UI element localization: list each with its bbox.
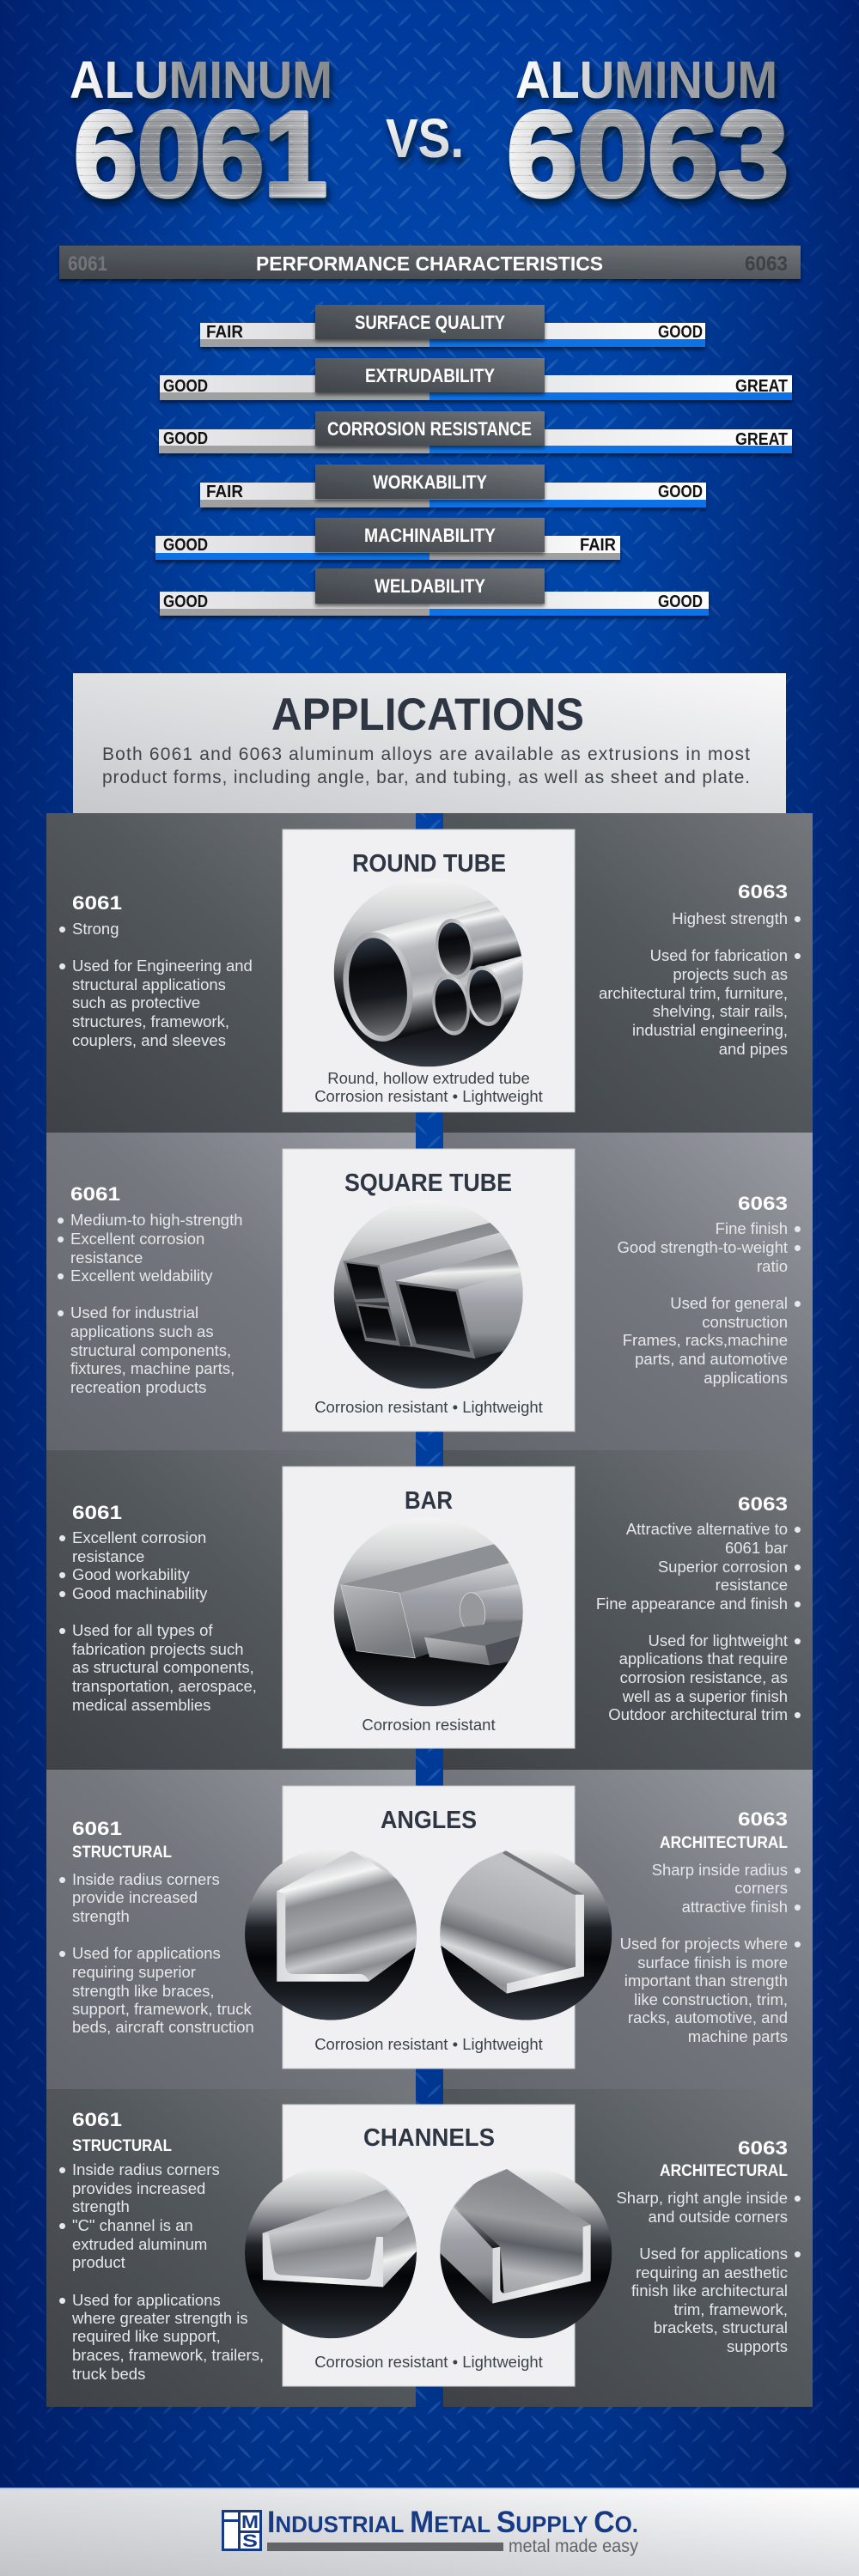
card: round tube: Corrosion resistant • Lightweight	[314, 1087, 543, 1105]
panel: round tube 6061: couplers, and sleeves	[72, 1031, 226, 1049]
comparison: corrosion resistance: GREAT	[735, 430, 788, 449]
panel: square tube 6061: Medium-to high-strength	[70, 1211, 243, 1229]
performance characteristics header: 6063	[745, 252, 788, 276]
comparison: corrosion resistance	[159, 411, 792, 453]
card: bar: BAR	[405, 1487, 453, 1515]
title right: aluminum 6063: 6063	[507, 86, 789, 222]
comparison: surface quality: FAIR	[206, 323, 244, 342]
title vs: VS.	[386, 107, 464, 169]
panel: square tube 6063: Fine finish	[716, 1219, 788, 1237]
logo icon	[222, 2510, 262, 2551]
panel: round tube 6061: structures, framework,	[72, 1012, 229, 1030]
panel: square tube 6063: 6063	[738, 1193, 788, 1214]
panel: angles 6061: requiring superior	[72, 1963, 196, 1981]
applications intro panel: product forms, including angle, bar, and tubing, as well as sheet and plate.	[102, 768, 750, 787]
title left: aluminum 6061: ALUMINUM	[70, 51, 332, 109]
card: angles: Corrosion resistant • Lightweight	[314, 2035, 543, 2053]
panel: channels 6063: •	[794, 2185, 801, 2211]
panel: round tube 6063: shelving, stair rails,	[653, 1002, 788, 1020]
panel: channels 6063	[443, 2089, 813, 2407]
panel: square tube 6061	[46, 1133, 416, 1450]
panel: square tube 6061: Excellent corrosion	[70, 1230, 204, 1248]
comparison: machinability: GOOD	[163, 536, 208, 555]
panel: bar 6061: transportation, aerospace,	[72, 1677, 257, 1695]
logo icon: S	[242, 2531, 258, 2551]
icon: round tubes	[334, 878, 530, 1066]
panel: bar 6061: Good workability	[72, 1565, 191, 1583]
panel: angles 6063: attractive finish	[682, 1898, 788, 1916]
panel: square tube 6061: •	[57, 1263, 64, 1289]
card: channels: Corrosion resistant • Lightweight	[314, 2353, 543, 2371]
panel: channels 6061: STRUCTURAL	[72, 2137, 172, 2155]
panel: square tube 6063	[443, 1133, 813, 1450]
panel: angles 6063	[443, 1770, 813, 2089]
panel: bar 6063: •	[794, 1628, 801, 1654]
panel: bar 6063: Attractive alternative to	[626, 1520, 788, 1538]
panel: square tube 6063: Frames, racks,machine	[623, 1331, 788, 1349]
panel: square tube 6061: Used for industrial	[70, 1303, 198, 1321]
panel: bar 6061: as structural components,	[72, 1658, 254, 1676]
comparison: extrudability: GREAT	[735, 377, 788, 396]
panel: angles 6061	[46, 1770, 416, 2089]
comparison: workability	[200, 465, 706, 507]
panel: bar 6061: •	[58, 1618, 66, 1643]
panel: round tube 6063: •	[794, 943, 801, 969]
title right: aluminum 6063: 6063	[507, 86, 789, 222]
panel: round tube 6061: structural applications	[72, 975, 226, 993]
panel: channels 6063: •	[794, 2241, 801, 2267]
comparison: workability: WORKABILITY	[373, 471, 487, 493]
panel: bar 6061: •	[58, 1525, 66, 1551]
panel: bar 6061: resistance	[72, 1547, 144, 1565]
panel: round tube 6063: •	[794, 906, 801, 932]
panel: angles 6061: •	[58, 1867, 66, 1893]
panel: bar 6063: 6061 bar	[725, 1539, 788, 1557]
panel: square tube 6063: Used for general	[670, 1294, 788, 1312]
card: bar	[283, 1467, 575, 1748]
panel: square tube 6061: 6061	[70, 1183, 120, 1205]
panel: angles 6061: 6061	[72, 1818, 122, 1839]
panel: channels 6061: provides increased	[72, 2179, 205, 2197]
comparison: surface quality	[200, 305, 705, 347]
performance characteristics header: PERFORMANCE CHARACTERISTICS	[256, 252, 603, 275]
panel: round tube 6063: Used for fabrication	[650, 946, 788, 964]
panel: square tube 6063: •	[794, 1291, 801, 1316]
card: angles	[245, 1786, 612, 2069]
panel: round tube 6061	[46, 813, 416, 1133]
panel: square tube 6061: •	[57, 1300, 64, 1326]
panel: bar 6063: applications that require	[619, 1649, 788, 1668]
panel: square tube 6063: ratio	[757, 1257, 788, 1275]
row: channels	[46, 2089, 813, 2407]
panel: bar 6061: medical assemblies	[72, 1696, 210, 1714]
panel: bar 6063: well as a superior finish	[622, 1687, 788, 1705]
panel: angles 6061: STRUCTURAL	[72, 1844, 172, 1862]
panel: angles 6061: strength	[72, 1907, 130, 1925]
panel: angles 6063: ARCHITECTURAL	[660, 1834, 788, 1852]
panel: angles 6063: like construction, trim,	[634, 1990, 788, 2008]
icon: angle with inside radius	[245, 1849, 421, 2020]
panel: channels 6061: 6061	[72, 2109, 122, 2130]
applications intro panel: Both 6061 and 6063 aluminum alloys are available as extrusions in most	[102, 744, 750, 764]
icon: angle with sharp corners	[438, 1849, 612, 2020]
panel: channels 6063: brackets, structural	[654, 2318, 788, 2336]
panel: round tube 6063: and pipes	[719, 1040, 788, 1058]
title left: aluminum 6061: 6061	[74, 86, 327, 222]
panel: round tube 6063	[443, 813, 813, 1133]
card: square tube: Corrosion resistant • Lightweight	[314, 1398, 543, 1416]
comparison: extrudability: EXTRUDABILITY	[365, 365, 495, 386]
card: round tube: ROUND TUBE	[352, 850, 506, 878]
panel: square tube 6063: •	[794, 1235, 801, 1261]
card: round tube	[283, 829, 575, 1112]
panel: round tube 6061: such as protective	[72, 993, 200, 1012]
panel: square tube 6061: •	[57, 1207, 64, 1233]
logo wordmark: INDUSTRIAL METAL SUPPLY CO.	[267, 2506, 638, 2539]
comparison: machinability	[155, 518, 620, 560]
panel: angles 6061: Inside radius corners	[72, 1870, 220, 1888]
panel: channels 6061: •	[58, 2213, 66, 2239]
comparison: weldability: WELDABILITY	[375, 575, 485, 597]
comparison: corrosion resistance: CORROSION RESISTANCE	[327, 418, 532, 440]
panel: channels 6063: ARCHITECTURAL	[660, 2162, 788, 2180]
icon: channel with sharp corners	[438, 2166, 612, 2338]
card: channels	[245, 2105, 612, 2386]
panel: bar 6061: 6061	[72, 1502, 122, 1523]
panel: channels 6063: Sharp, right angle inside	[616, 2189, 788, 2207]
panel: channels 6063: trim, framework,	[673, 2300, 788, 2318]
title	[70, 51, 789, 222]
panel: bar 6063: resistance	[716, 1576, 788, 1594]
panel: bar 6061: fabrication projects such	[72, 1640, 244, 1658]
comparison: weldability: GOOD	[658, 592, 703, 611]
panel: bar 6061: Used for all types of	[72, 1621, 213, 1639]
panel: angles 6063: Sharp inside radius	[652, 1861, 788, 1879]
panel: angles 6061: provide increased	[72, 1888, 198, 1906]
row: round tube	[46, 813, 813, 1133]
panel: bar 6063: corrosion resistance, as	[620, 1668, 788, 1686]
comparison: machinability: MACHINABILITY	[364, 525, 496, 546]
panel: square tube 6063: •	[794, 1216, 801, 1242]
panel: square tube 6061: fixtures, machine parts,	[70, 1359, 235, 1377]
panel: channels 6061: extruded aluminum	[72, 2235, 207, 2253]
title left: aluminum 6061: 6061	[74, 86, 327, 222]
panel: channels 6063: and outside corners	[648, 2208, 788, 2226]
panel: bar 6063: •	[794, 1702, 801, 1728]
applications intro panel: APPLICATIONS	[271, 690, 584, 740]
comparison: workability: FAIR	[206, 483, 244, 501]
comparison: weldability	[160, 568, 709, 616]
panel: channels 6063: Used for applications	[639, 2245, 788, 2263]
panel: square tube 6063: Good strength-to-weight	[618, 1238, 788, 1256]
panel: bar 6063: Outdoor architectural trim	[608, 1705, 788, 1723]
panel: bar 6061: Good machinability	[72, 1584, 208, 1602]
panel: channels 6061: strength	[72, 2197, 130, 2215]
panel: round tube 6061: •	[58, 953, 66, 979]
panel: round tube 6063: Highest strength	[672, 909, 788, 927]
panel: channels 6063: supports	[727, 2337, 788, 2355]
panel: bar 6061	[46, 1450, 416, 1770]
panel: channels 6061: •	[58, 2287, 66, 2313]
panel: round tube 6063: 6063	[738, 881, 788, 902]
panel: bar 6063: •	[794, 1591, 801, 1617]
panel: angles 6063: machine parts	[688, 2027, 788, 2045]
panel: square tube 6061: recreation products	[70, 1378, 206, 1396]
icon: channel with inside radius	[245, 2166, 421, 2338]
tagline: metal made easy	[509, 2537, 638, 2556]
panel: round tube 6061: Used for Engineering and	[72, 957, 253, 975]
panel: angles 6061: •	[58, 1941, 66, 1966]
panel: bar 6061: •	[58, 1581, 66, 1607]
panel: round tube 6063: industrial engineering,	[632, 1021, 788, 1039]
panel: channels 6063: 6063	[738, 2137, 788, 2159]
row: square tube	[46, 1133, 813, 1450]
panel: square tube 6063: applications	[704, 1369, 788, 1387]
comparison: workability: GOOD	[658, 483, 703, 501]
panel: angles 6063: racks, automotive, and	[628, 2008, 788, 2026]
comparison: weldability: GOOD	[163, 592, 208, 611]
logo: IMS	[222, 2506, 638, 2556]
performance characteristics header: 6061	[68, 252, 107, 276]
card: round tube: Round, hollow extruded tube	[327, 1069, 530, 1087]
comparison: extrudability	[160, 358, 792, 400]
panel: angles 6063: 6063	[738, 1808, 788, 1830]
panel: channels 6061: •	[58, 2157, 66, 2183]
performance characteristics header	[59, 246, 801, 279]
comparison: extrudability: GOOD	[163, 377, 208, 396]
panel: angles 6061: support, framework, truck	[72, 2000, 252, 2018]
panel: angles 6061: strength like braces,	[72, 1982, 215, 2000]
title right: aluminum 6063: 6063	[507, 86, 789, 222]
panel: channels 6061: required like support,	[72, 2327, 221, 2345]
comparison: surface quality: SURFACE QUALITY	[355, 312, 505, 333]
panel: channels 6063: finish like architectural	[631, 2281, 788, 2300]
icon: bars	[334, 1517, 527, 1706]
panel: channels 6061: braces, framework, trailers,	[72, 2346, 264, 2364]
panel: square tube 6063: construction	[702, 1313, 788, 1331]
panel: round tube 6061: Strong	[72, 920, 119, 938]
panel: channels 6061: "C" channel is an	[72, 2216, 193, 2234]
card: square tube: SQUARE TUBE	[344, 1170, 512, 1197]
panel: round tube 6061: 6061	[72, 892, 122, 914]
panel: angles 6063: •	[794, 1894, 801, 1920]
panel: channels 6061	[46, 2089, 416, 2407]
row: angles	[46, 1770, 813, 2089]
panel: bar 6063: Fine appearance and finish	[596, 1595, 788, 1613]
panel: bar 6061: Excellent corrosion	[72, 1528, 206, 1546]
panel: bar 6063: Used for lightweight	[649, 1631, 788, 1649]
panel: angles 6063: •	[794, 1931, 801, 1957]
panel: round tube 6063: architectural trim, furniture,	[599, 984, 788, 1002]
panel: bar 6063: •	[794, 1554, 801, 1580]
panel: square tube 6061: applications such as	[70, 1322, 214, 1340]
panel: angles 6063: •	[794, 1857, 801, 1883]
panel: channels 6061: Inside radius corners	[72, 2160, 220, 2178]
panel: angles 6061: beds, aircraft construction	[72, 2018, 254, 2036]
panel: angles 6061: Used for applications	[72, 1944, 221, 1962]
panel: square tube 6061: Excellent weldability	[70, 1267, 213, 1285]
card: bar: Corrosion resistant	[362, 1716, 496, 1734]
panel: bar 6061: •	[58, 1562, 66, 1588]
panel: round tube 6063: projects such as	[673, 965, 788, 983]
logo icon: M	[241, 2512, 259, 2532]
panel: angles 6063: important than strength	[624, 1971, 788, 1990]
title right: aluminum 6063: ALUMINUM	[515, 51, 777, 109]
card: angles: ANGLES	[381, 1807, 477, 1834]
panel: bar 6063: Superior corrosion	[658, 1558, 788, 1576]
panel: angles 6063: surface finish is more	[637, 1953, 788, 1971]
comparison: surface quality: GOOD	[658, 323, 703, 342]
card: channels: CHANNELS	[363, 2124, 495, 2152]
icon: square tubes	[334, 1200, 530, 1388]
panel: channels 6061: truck beds	[72, 2365, 145, 2383]
card: square tube	[283, 1149, 575, 1431]
footer band	[0, 2488, 859, 2576]
panel: bar 6063	[443, 1450, 813, 1770]
title left: aluminum 6061: 6061	[74, 86, 327, 222]
panel: square tube 6061: structural components,	[70, 1341, 231, 1359]
panel: channels 6061: where greater strength is	[71, 2309, 248, 2327]
panel: bar 6063: 6063	[738, 1493, 788, 1515]
panel: channels 6063: requiring an aesthetic	[636, 2263, 788, 2281]
comparison: machinability: FAIR	[580, 536, 617, 555]
panel: channels 6061: product	[72, 2253, 125, 2271]
row: bar	[46, 1450, 813, 1770]
panel: square tube 6061: •	[57, 1226, 64, 1252]
panel: square tube 6063: parts, and automotive	[635, 1350, 788, 1368]
applications intro panel	[73, 673, 786, 813]
panel: round tube 6061: •	[58, 916, 66, 942]
panel: channels 6061: Used for applications	[72, 2291, 221, 2309]
panel: angles 6063: corners	[734, 1879, 788, 1897]
comparison: corrosion resistance: GOOD	[163, 429, 208, 448]
panel: angles 6063: Used for projects where	[620, 1935, 788, 1953]
panel: bar 6063: •	[794, 1516, 801, 1542]
panel: square tube 6061: resistance	[70, 1249, 143, 1267]
